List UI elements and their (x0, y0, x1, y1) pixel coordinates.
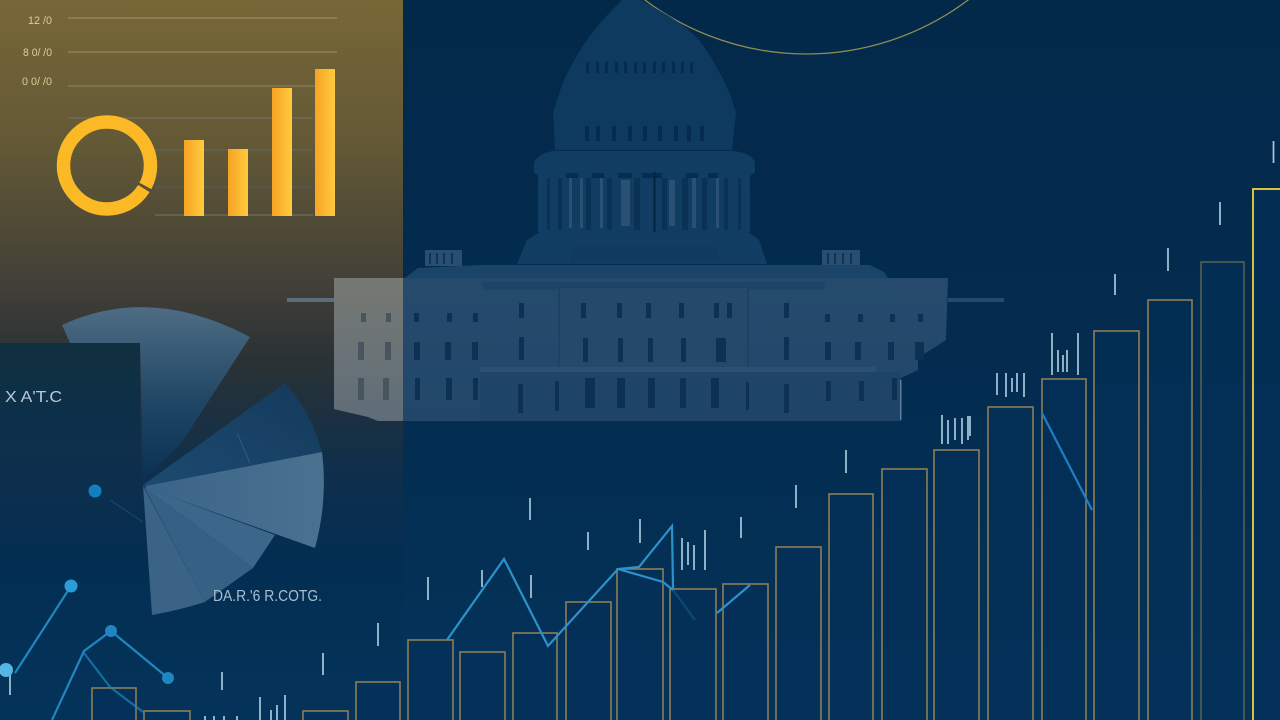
sector inner line (237, 433, 250, 463)
left wing over gold (334, 278, 403, 422)
panel: dark label box (0, 343, 140, 513)
axis labels: 0 0/ /0 (22, 76, 52, 88)
label: pie text: DA.R.'6 R.COTG. (213, 588, 322, 605)
lower band (480, 367, 876, 372)
axis labels: 8 0/ /0 (23, 47, 52, 59)
sector bottom (143, 486, 205, 615)
outlined bar chart (92, 189, 1280, 720)
line chart: left (15, 500, 168, 720)
axis labels (22, 15, 52, 88)
windows row one (414, 303, 923, 322)
tick marks (10, 141, 1274, 720)
label: left box text: X A'T.C (5, 389, 62, 406)
sector mid (144, 487, 275, 568)
facade edge highlight (900, 380, 902, 420)
dome windows lower (585, 126, 704, 141)
windows row three (415, 378, 897, 413)
sector mid lower (144, 487, 253, 602)
arc: top circle outline (538, 0, 1075, 54)
panel: gold chart (22, 15, 337, 216)
data points (0, 484, 174, 684)
colonnade shadows (547, 173, 741, 230)
sector dark (143, 383, 322, 487)
right cupola (822, 250, 860, 266)
dome base step (569, 247, 722, 263)
dome windows upper (586, 62, 693, 73)
central dark line (654, 172, 656, 244)
left cupola (425, 250, 462, 266)
sector light (146, 452, 324, 548)
upper roof (405, 265, 888, 278)
bar 4 (315, 69, 335, 216)
dome base (517, 232, 767, 264)
windows row two (414, 337, 924, 362)
bar 3 (272, 88, 292, 216)
panel: gold backdrop (0, 0, 403, 720)
main facade (334, 278, 948, 421)
windows over gold (358, 313, 391, 400)
side rails (287, 298, 1004, 302)
grid lines (68, 18, 337, 215)
illustration: capitol building (287, 0, 1004, 422)
bar 2 (228, 149, 248, 216)
line chart: right segment (1042, 413, 1092, 510)
pie chart (143, 383, 324, 615)
portico (559, 287, 748, 368)
dome (553, 0, 736, 150)
lower shadow (480, 372, 901, 421)
pie sector behind label box (62, 307, 250, 480)
bar 1 (184, 140, 204, 216)
line chart: center (447, 526, 750, 646)
donut chart (64, 122, 150, 209)
roof band (482, 282, 825, 290)
colonnade (534, 151, 755, 232)
colonnade highlights (569, 178, 719, 228)
axis labels: 12 /0 (28, 15, 52, 27)
